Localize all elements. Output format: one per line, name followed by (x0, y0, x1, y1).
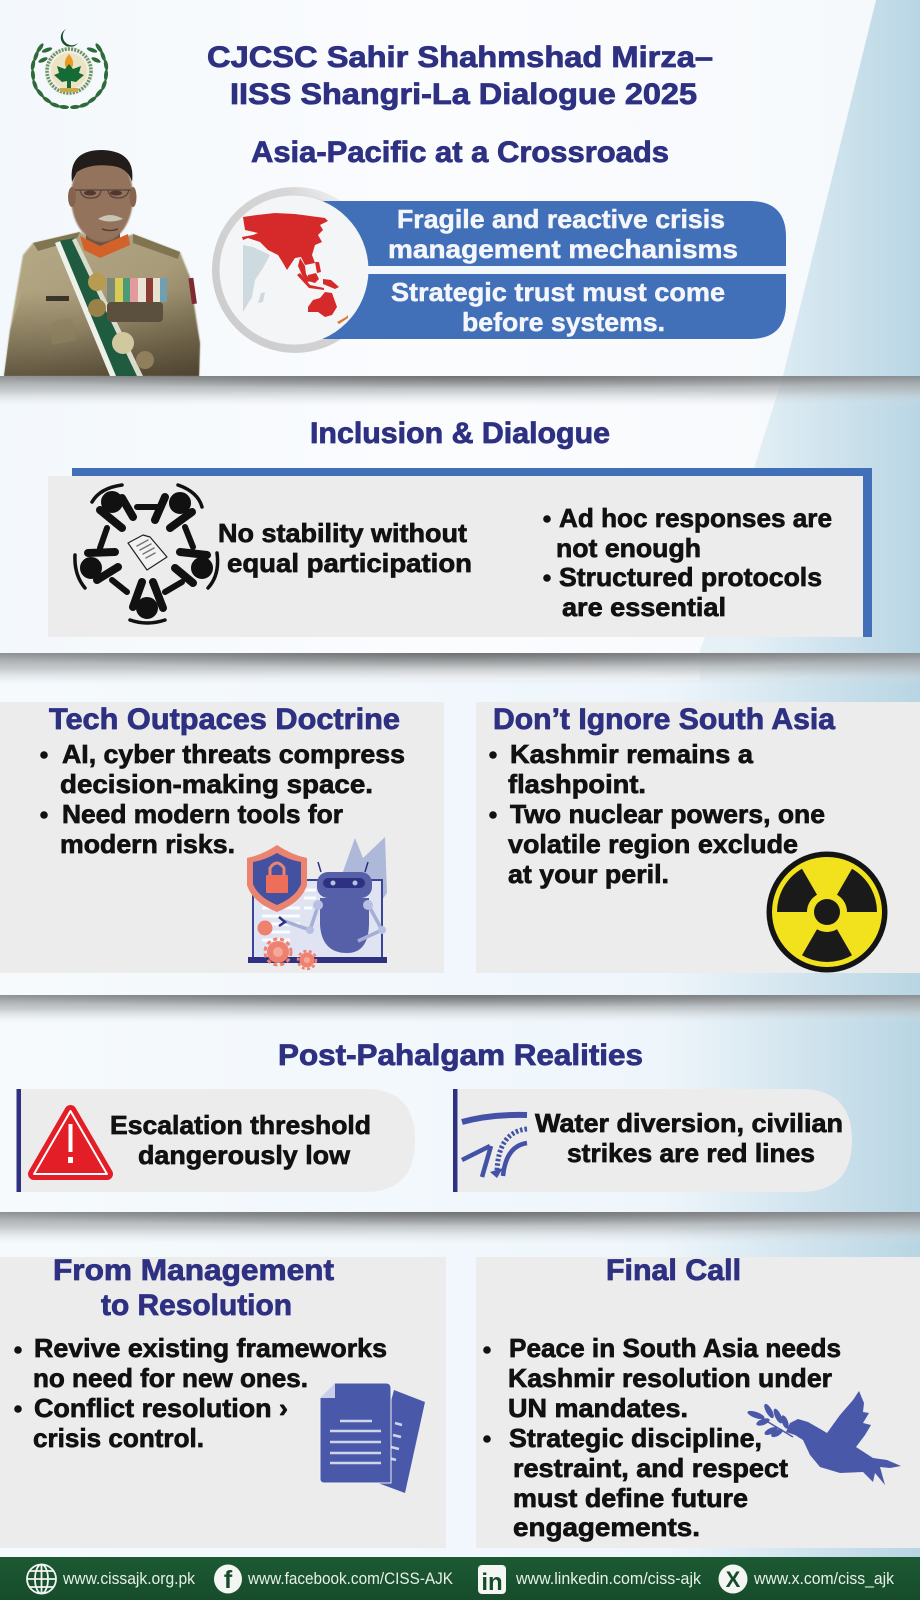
icon: warning triangle (34, 1111, 107, 1174)
New Zealand (337, 315, 348, 324)
flame (65, 54, 73, 70)
banner: crisis management messages: Fragile and reactive crisis (397, 204, 725, 234)
panel: don't ignore South Asia (476, 702, 920, 973)
bullets: protocols: are essential (562, 592, 726, 622)
banner: crisis management messages: management mechanisms (388, 234, 738, 264)
wreath (30, 42, 109, 109)
bullets: Conflict resolution › (34, 1393, 288, 1423)
bullets: Two nuclear powers, one (510, 799, 825, 829)
icon: LinkedIn (478, 1565, 506, 1596)
name tag (46, 296, 69, 301)
heading: Tech Outpaces Doctrine (49, 703, 400, 736)
bullets: at your peril. (508, 859, 669, 889)
banner upper segment (318, 201, 786, 266)
heading: Don’t Ignore South Asia (493, 703, 835, 736)
text (535, 1108, 843, 1168)
ribbon bars (107, 278, 167, 302)
icon: X: X (726, 1567, 741, 1592)
banner: crisis management messages (318, 201, 786, 339)
heading (53, 1254, 334, 1322)
text (110, 1110, 371, 1170)
logo: CISS emblem (30, 29, 109, 109)
bullets: flashpoint. (508, 769, 646, 799)
text: Water diversion, civilian (535, 1108, 843, 1138)
medals (107, 302, 163, 322)
link: LinkedIn: www.linkedin.com/ciss-ajk (515, 1569, 701, 1588)
icon: globe (27, 1564, 56, 1594)
bullets (489, 739, 825, 889)
link: X: www.x.com/ciss_ajk (753, 1569, 894, 1588)
outer arcs (75, 485, 218, 623)
bullets: no need for new ones. (33, 1363, 308, 1393)
card: water diversion (453, 1089, 852, 1192)
title: IISS Shangri-La Dialogue 2025 (230, 78, 697, 111)
icon: diverted river (462, 1115, 527, 1178)
text: Escalation threshold (110, 1110, 371, 1140)
bullets: crisis control. (33, 1423, 204, 1453)
neck and head (86, 225, 120, 247)
crescent (61, 29, 78, 47)
icon: LinkedIn: in (481, 1569, 503, 1596)
bullets: AI, cyber threats compress (62, 739, 405, 769)
shadow band 1 (0, 376, 920, 406)
bullets: Peace in South Asia needs (509, 1333, 841, 1363)
panel: from management to resolution (0, 1254, 446, 1548)
bullets: engagements. (513, 1512, 700, 1542)
bullets: protocols: Structured protocols (559, 562, 822, 592)
title (207, 41, 713, 111)
bullets: Revive existing frameworks (34, 1333, 387, 1363)
Southeast Asia and Indonesia (297, 258, 339, 290)
shadow band 3 (0, 995, 920, 1023)
text: no stability (218, 518, 472, 578)
heads (102, 492, 122, 512)
bullets: restraint, and respect (513, 1453, 788, 1483)
bullets: must define future (513, 1483, 748, 1513)
bullets: UN mandates. (508, 1393, 688, 1423)
glasses (75, 190, 131, 198)
heading: to Resolution (101, 1289, 292, 1322)
bullets: Kashmir resolution under (508, 1363, 832, 1393)
footer: contact links (0, 1557, 920, 1600)
text: no stability: No stability without (218, 518, 467, 548)
panel: final call (476, 1254, 920, 1548)
icon: radiation symbol (766, 852, 888, 972)
text: dangerously low (138, 1140, 351, 1170)
arms (88, 497, 207, 608)
icon: Facebook (214, 1564, 242, 1594)
icon: documents (320, 1383, 425, 1493)
bullets: volatile region exclude (508, 829, 798, 859)
bullets: Strategic discipline, (509, 1423, 762, 1453)
map ring (216, 191, 374, 349)
banner: crisis management messages: Strategic trust must come (391, 277, 725, 307)
panel: tech outpaces doctrine (0, 702, 444, 973)
maple leaf (54, 64, 84, 88)
Eurasia (red) (242, 213, 328, 270)
bullets: decision-making space. (60, 769, 373, 799)
text: no stability: equal participation (227, 548, 472, 578)
table segments (100, 507, 193, 592)
Australia (308, 292, 337, 317)
icon: X (718, 1564, 748, 1594)
bullets: modern risks. (60, 829, 235, 859)
bullets (14, 1333, 387, 1453)
bullets: protocols (543, 503, 832, 622)
bullets: Kashmir remains a (510, 739, 754, 769)
shadow band 4 (0, 1212, 920, 1244)
sash (58, 238, 141, 376)
banner lower segment (318, 274, 786, 339)
icon: round table of five people (75, 485, 218, 623)
banner: crisis management messages: before systems. (462, 307, 665, 337)
portrait: CJCSC in uniform (4, 150, 200, 376)
bullets (483, 1333, 841, 1542)
shadow band 2 (0, 653, 920, 685)
shield (247, 845, 307, 912)
heading: Final Call (606, 1254, 741, 1287)
collar (80, 234, 130, 258)
icon: Facebook: f (224, 1566, 233, 1594)
bullets (40, 739, 405, 859)
link: website: www.cissajk.org.pk (62, 1569, 195, 1588)
bullets: protocols: not enough (556, 533, 701, 563)
gears (267, 941, 289, 963)
title: CJCSC Sahir Shahmshad Mirza– (207, 41, 713, 74)
uniform body (4, 232, 200, 376)
panel: inclusion and dialogue (48, 468, 872, 637)
icon: dove with olive branch (747, 1391, 901, 1485)
robot (318, 862, 368, 872)
heading: Inclusion & Dialogue: Inclusion & Dialogue (310, 417, 610, 450)
map circle: Asia-Pacific (220, 196, 368, 344)
blue frame (72, 468, 872, 637)
card: escalation threshold (16, 1089, 415, 1192)
bullets: protocols: Ad hoc responses are (559, 503, 832, 533)
document (128, 535, 167, 570)
heading: From Management (53, 1254, 334, 1287)
bullets: Need modern tools for (62, 799, 343, 829)
icon: robot, shield and laptop (247, 837, 387, 969)
heading: Post-Pahalgam Realities: Post-Pahalgam Realities (278, 1039, 643, 1072)
link: Facebook: www.facebook.com/CISS-AJK (247, 1569, 454, 1588)
text: strikes are red lines (567, 1138, 815, 1168)
heading: Asia-Pacific at a Crossroads: Asia-Pacific at a Crossroads (251, 136, 669, 169)
Africa (grey) (243, 245, 270, 312)
